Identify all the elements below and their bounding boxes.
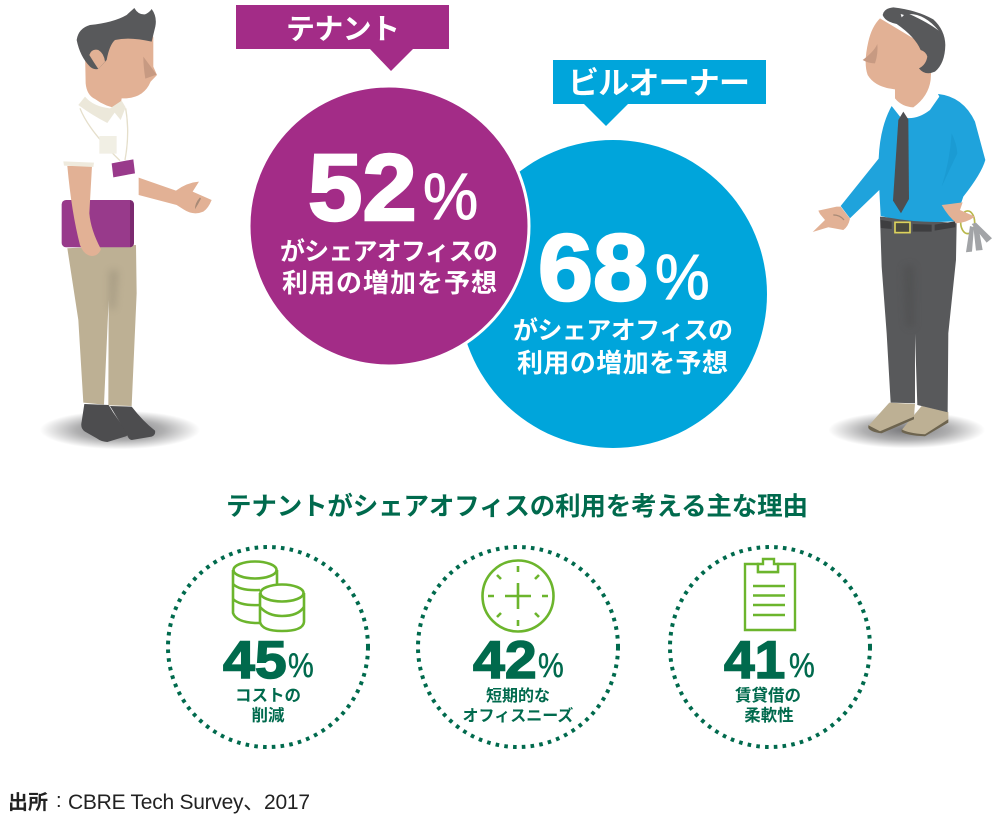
value 41%: % xyxy=(789,646,815,685)
source note xyxy=(8,786,310,815)
caption: オフィスニーズ xyxy=(463,702,573,726)
owner caption: がシェアオフィスの xyxy=(513,311,733,347)
value 42%: % xyxy=(538,646,564,685)
label: building owner: ビルオーナー xyxy=(568,58,750,103)
source note: : xyxy=(56,790,62,812)
caption: 短期的な xyxy=(486,682,550,706)
caption xyxy=(735,682,801,726)
icon: clock xyxy=(482,560,554,632)
heading: reasons: テナントがシェアオフィスの利用を考える主な理由 xyxy=(226,486,808,523)
owner percentage: % xyxy=(655,242,710,313)
value 41% xyxy=(724,631,815,690)
caption xyxy=(235,682,301,726)
owner caption xyxy=(513,311,733,380)
tenant percentage: 52 xyxy=(308,135,417,241)
label: building owner xyxy=(553,58,766,126)
owner caption: 利用の増加を予想 xyxy=(517,343,728,380)
tenant percentage: % xyxy=(423,159,478,233)
circle: building owner 68% xyxy=(459,140,767,448)
caption: 賃貸借の xyxy=(735,682,801,706)
owner percentage xyxy=(538,214,710,321)
caption: 削減 xyxy=(252,702,285,726)
tenant caption: がシェアオフィスの xyxy=(280,232,498,268)
tenant percentage xyxy=(308,135,478,241)
caption xyxy=(463,682,573,726)
figure: tenant man xyxy=(40,8,212,449)
panel: short-term office needs 42% xyxy=(418,547,618,747)
value 41%: 41 xyxy=(724,631,785,690)
value 45%: 45 xyxy=(223,630,287,690)
circle: tenant 52% xyxy=(249,86,529,366)
caption: コストの xyxy=(235,682,301,706)
source note: 出所 xyxy=(8,786,48,815)
label: tenant: テナント xyxy=(286,6,400,48)
tenant caption xyxy=(280,232,498,300)
belt xyxy=(881,220,955,232)
owner percentage: 68 xyxy=(538,214,648,321)
figure: building owner man xyxy=(813,7,992,448)
source note: CBRE Tech Survey、2017 xyxy=(68,791,310,814)
label: tenant xyxy=(236,5,449,71)
panel: cost reduction 45% xyxy=(168,547,368,747)
icon: clipboard xyxy=(745,559,795,630)
icon: coins xyxy=(233,562,304,631)
tenant caption: 利用の増加を予想 xyxy=(282,263,497,300)
value 42%: 42 xyxy=(473,630,537,690)
value 45%: % xyxy=(288,646,314,685)
caption: 柔軟性 xyxy=(744,702,794,726)
keys xyxy=(961,211,992,252)
panel: lease flexibility 41% xyxy=(670,547,870,747)
